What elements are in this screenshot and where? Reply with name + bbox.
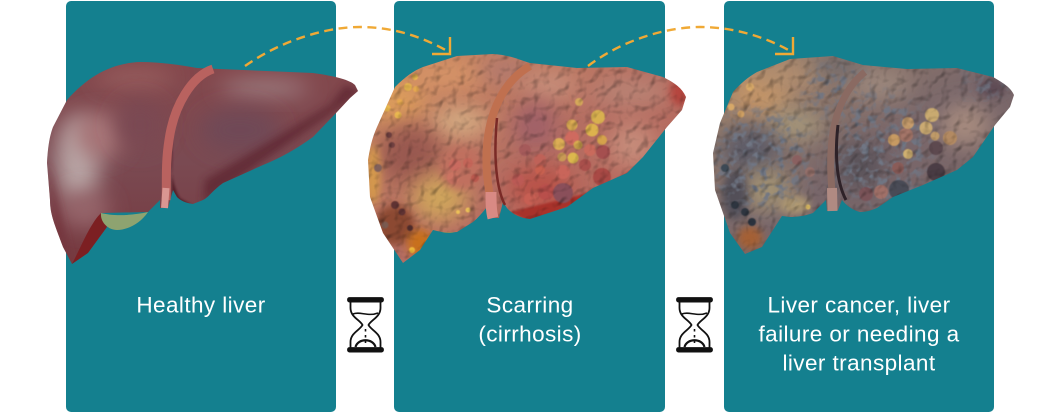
panel: liver cancer — [724, 1, 994, 412]
gallbladder — [101, 212, 148, 230]
label: scarring — [478, 292, 582, 346]
ligament — [831, 72, 865, 198]
nodules — [374, 74, 611, 253]
label: cancer outcomes: failure or needing a — [758, 322, 960, 346]
label: scarring: (cirrhosis) — [478, 322, 582, 346]
ligament — [166, 69, 213, 200]
illustration: healthy liver — [47, 62, 358, 264]
dark speckled patches — [710, 65, 1007, 210]
ligament — [486, 66, 530, 205]
label: cancer outcomes — [758, 292, 960, 376]
label: healthy liver: Healthy liver — [136, 292, 266, 318]
icon: hourglass — [348, 298, 383, 352]
label: scarring: Scarring — [486, 292, 574, 318]
panel: scarring — [394, 1, 665, 412]
arrow: scarring to cancer — [588, 27, 793, 66]
panel: healthy liver — [66, 1, 336, 412]
arrow: healthy to scarring — [245, 27, 450, 66]
nodules — [721, 83, 957, 226]
icon: hourglass — [677, 298, 712, 352]
illustration: cancerous liver — [713, 56, 1014, 254]
label: cancer outcomes: Liver cancer, liver — [767, 292, 951, 318]
illustration: scarred liver — [360, 50, 690, 270]
label: cancer outcomes: liver transplant — [782, 350, 936, 376]
